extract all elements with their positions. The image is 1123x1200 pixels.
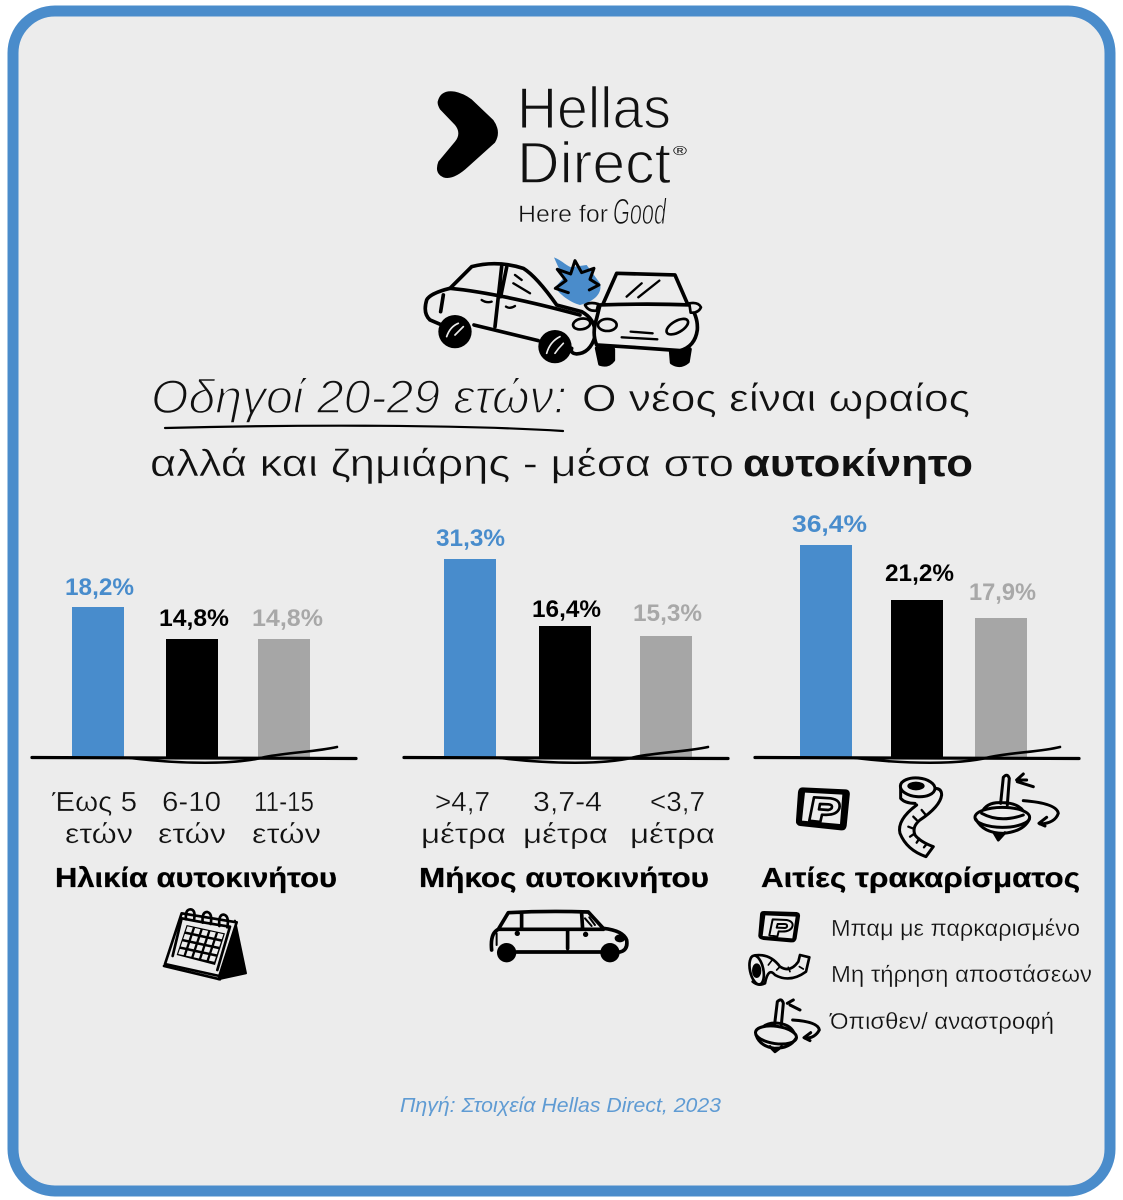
category labels: ετών — [158, 818, 226, 849]
icon: measuring tape — [900, 777, 942, 857]
title line 2: αλλά και ζημιάρης - μέσα στο — [150, 443, 734, 485]
icon: blue impact flash — [554, 257, 601, 305]
category labels: 3,7-4 — [533, 786, 602, 817]
source note: Πηγή: Στοιχεία Hellas Direct, 2023 — [400, 1095, 721, 1117]
right car — [585, 273, 701, 365]
title — [150, 370, 973, 485]
left car — [425, 264, 595, 363]
bar chart: car age: 14,8% — [252, 605, 323, 632]
category labels: μέτρα — [523, 818, 608, 849]
bar chart: car length: 16,4% — [532, 596, 601, 623]
title underline — [165, 426, 563, 431]
category labels: 11-15 — [254, 786, 314, 817]
logo: Hellas Direct — [437, 76, 688, 232]
category labels: Έως 5 — [51, 786, 137, 817]
bar chart: car age — [32, 574, 356, 763]
icon: boomerang chevron — [437, 91, 498, 178]
legend icon: spinning top — [754, 1000, 819, 1052]
icon: limousine — [491, 911, 627, 962]
category labels: ετών — [252, 818, 321, 849]
panel: crash causes chart — [747, 511, 1092, 1052]
legend: crash causes — [747, 911, 1092, 1052]
icon: spinning top — [975, 774, 1058, 840]
logo wordmark line 2: Direct — [517, 131, 671, 196]
title line 1: Ο νέος είναι ωραίος — [582, 378, 970, 420]
icon row — [796, 774, 1058, 857]
panel: car length chart — [404, 525, 728, 962]
bar chart: car age: 18,2% — [65, 574, 134, 601]
category labels: ετών — [65, 818, 133, 849]
illustration: two cars crashing — [425, 257, 701, 365]
tagline: Here for — [518, 201, 608, 228]
legend icon: tape — [747, 954, 809, 986]
bar chart: crash causes: 17,9% — [969, 579, 1036, 606]
title bold word: αυτοκίνητο — [743, 443, 973, 485]
bar chart: car length: 15,3% — [633, 600, 702, 627]
panel: car age chart — [32, 574, 356, 979]
heading: car age: Ηλικία αυτοκινήτου — [55, 862, 337, 893]
icon: parking sign — [796, 787, 850, 830]
legend label: distance: Μη τήρηση αποστάσεων — [831, 961, 1092, 987]
logo wordmark line 1: Hellas — [517, 76, 671, 141]
category labels: 6-10 — [162, 786, 221, 817]
bar chart: crash causes — [755, 511, 1079, 763]
bar chart: car age: 14,8% — [159, 605, 229, 632]
heading: crash causes: Αιτίες τρακαρίσματος — [761, 862, 1080, 893]
heading: car length: Μήκος αυτοκινήτου — [419, 862, 709, 893]
icon: calendar — [164, 909, 246, 979]
bar chart: car length — [404, 525, 728, 763]
bar chart: crash causes: 36,4% — [792, 511, 867, 538]
bar chart: crash causes: 21,2% — [885, 560, 954, 587]
category labels: <3,7 — [650, 786, 705, 817]
registered mark: ® — [673, 143, 688, 158]
category labels: μέτρα — [421, 818, 506, 849]
category labels — [51, 786, 321, 849]
category labels: >4,7 — [435, 786, 490, 817]
bar chart: car length: 31,3% — [436, 525, 505, 552]
legend icon: parking — [758, 911, 800, 942]
category labels — [421, 786, 715, 849]
legend label: parked: Μπαμ με παρκαρισμένο — [831, 915, 1080, 941]
category labels: μέτρα — [630, 818, 715, 849]
legend label: reverse: Όπισθεν/ αναστροφή — [829, 1008, 1054, 1034]
tagline handwritten word: Good — [613, 191, 667, 232]
title handwritten part: Οδηγοί 20-29 ετών: — [151, 370, 567, 423]
